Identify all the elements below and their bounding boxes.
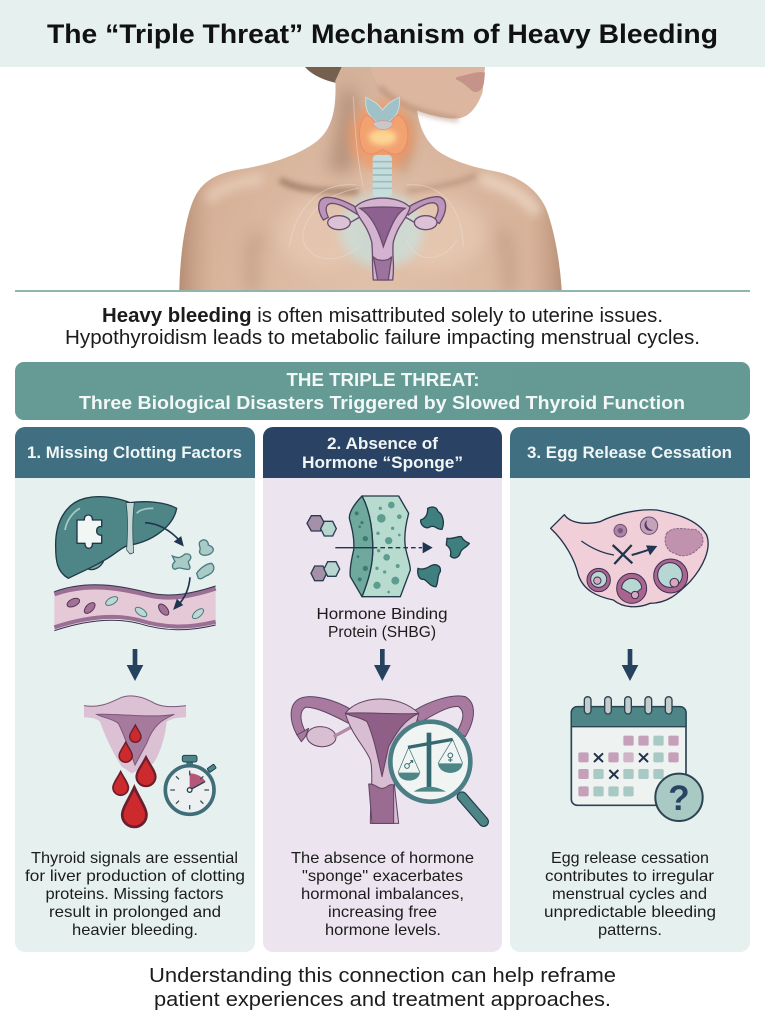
- hair: [305, 67, 342, 83]
- arrow: down: [374, 649, 391, 681]
- panel 2 description: hormonal imbalances,: [301, 886, 464, 903]
- panel 1 description: Thyroid signals are essential: [31, 850, 238, 867]
- panel 1 heading: [15, 427, 255, 478]
- panel 1 description: proteins. Missing factors: [46, 886, 224, 903]
- panel 2 description: hormone levels.: [325, 922, 441, 939]
- panel 3 description: menstrual cycles and: [552, 886, 707, 903]
- panel 3 description: unpredictable bleeding: [544, 904, 716, 921]
- torso: [179, 67, 562, 293]
- panel 1 description: result in prolonged and: [49, 904, 221, 921]
- arrow: down: [127, 649, 143, 681]
- icon: uterus: [291, 696, 473, 823]
- arrow: through sponge: [335, 542, 433, 553]
- icon caption: hormone binding protein: Hormone Binding: [316, 606, 448, 623]
- panel 2 heading: Hormone “Sponge”: [302, 453, 463, 472]
- panel 3 description: [544, 850, 716, 939]
- icon: clotting protein fragments: [172, 540, 214, 579]
- panel 1 illustrations: [54, 497, 216, 827]
- intro text: Heavy bleeding is often misattributed solely to uterine issues.: [102, 305, 663, 327]
- banner: the triple threat: THE TRIPLE THREAT:: [286, 369, 480, 390]
- panel 1 description: [25, 850, 245, 939]
- corpus: [665, 528, 703, 556]
- icon: liver with missing puzzle piece: [56, 497, 177, 578]
- panel 2 heading: [263, 427, 502, 478]
- icon: magnifier with hormone scale: [390, 722, 484, 822]
- icon: stopwatch: [165, 755, 216, 814]
- panel 3 description: contributes to irregular: [545, 868, 715, 885]
- arrow: proteins to vessel: [174, 577, 190, 609]
- uterus: [319, 197, 446, 280]
- title bar: [0, 0, 765, 67]
- banner: the triple threat: [15, 362, 750, 420]
- closing statement: patient experiences and treatment approaches.: [154, 989, 611, 1011]
- icon: question badge: ?: [668, 779, 690, 818]
- panel 1: missing clotting factors: [15, 427, 255, 952]
- panel 3 heading: [510, 427, 750, 478]
- hero illustration: torso with thyroid and uterus: [179, 67, 562, 293]
- icon: ovary with follicles: [551, 510, 708, 607]
- panel 3 illustrations: [551, 510, 708, 821]
- icon: uterus with blood drops: [84, 696, 186, 827]
- panel 2 heading: 2. Absence of: [327, 434, 438, 453]
- arrow: blocked egg release: [581, 541, 657, 564]
- lips: [456, 72, 485, 92]
- intro text: [65, 305, 700, 349]
- panel 2 description: increasing free: [328, 904, 437, 921]
- icon: sponge: [349, 496, 410, 597]
- closing statement: Understanding this connection can help reframe: [149, 965, 616, 987]
- follicles: [587, 559, 688, 603]
- thyroid: [359, 115, 408, 154]
- arrow: down: [622, 649, 638, 681]
- neck glow: [348, 102, 415, 172]
- icon caption: hormone binding protein: [316, 606, 448, 641]
- icon: hormones entering: [307, 516, 340, 581]
- panel 2: absence of hormone sponge: [263, 427, 502, 952]
- face and chin: [370, 67, 485, 119]
- panel 1 heading: 1. Missing Clotting Factors: [27, 443, 242, 462]
- icon: irregular calendar: [571, 697, 703, 821]
- divider rule: [15, 290, 750, 292]
- panel 2 description: The absence of hormone: [291, 850, 474, 867]
- icon: blood vessel: [54, 585, 216, 631]
- trachea: [373, 155, 392, 197]
- title: The “Triple Threat” Mechanism of Heavy Bleeding: [47, 19, 718, 49]
- panel 2 description: [291, 850, 474, 939]
- panel 3 heading: 3. Egg Release Cessation: [527, 443, 732, 462]
- nerve lines: [289, 97, 463, 259]
- panel 2 description: "sponge" exacerbates: [302, 868, 463, 885]
- panel 1 description: heavier bleeding.: [72, 922, 198, 939]
- panel 1 description: for liver production of clotting: [25, 868, 245, 885]
- closing statement: [149, 965, 616, 1011]
- panel 2 illustrations: [291, 496, 484, 823]
- intro text: Hypothyroidism leads to metabolic failure impacting menstrual cycles.: [65, 327, 700, 349]
- panel 3 description: Egg release cessation: [551, 850, 709, 867]
- larynx: [366, 97, 400, 124]
- banner: the triple threat: Three Biological Disasters Triggered by Slowed Thyroid Function: [79, 392, 685, 413]
- panel 3 description: patterns.: [598, 922, 662, 939]
- panel 3: egg release cessation: [510, 427, 750, 952]
- icon caption: hormone binding protein: Protein (SHBG): [328, 624, 436, 641]
- icon: free hormones: [418, 507, 469, 587]
- arrow: liver to proteins: [145, 523, 183, 546]
- aqua glow behind uterus: [340, 192, 423, 268]
